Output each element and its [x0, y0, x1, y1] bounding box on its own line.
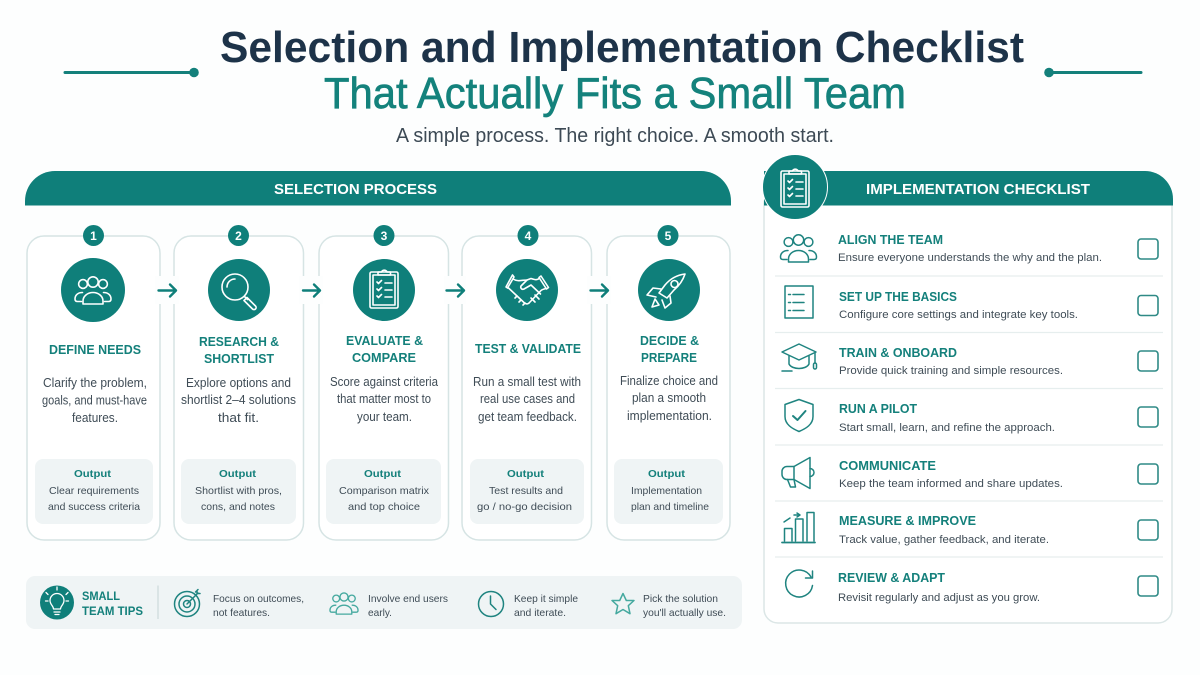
step heading: COMPARE — [352, 350, 416, 365]
tips heading — [82, 591, 143, 618]
output box — [181, 459, 296, 524]
step description: plan a smooth — [632, 391, 706, 405]
tip: focus on outcomes: not features. — [213, 607, 270, 619]
step description: Explore options and — [186, 376, 291, 390]
row: measure and improve: MEASURE & IMPROVE — [839, 514, 976, 528]
step description: Finalize choice and — [620, 374, 718, 388]
panel: small team tips — [26, 576, 742, 629]
title: Selection and Implementation Checklist — [220, 23, 1024, 72]
panel: step 1 define needs — [27, 225, 160, 540]
output box: Implementation — [631, 485, 702, 497]
output box: Output — [648, 468, 686, 480]
step number 3: 3 — [381, 229, 388, 243]
step number 5: 5 — [665, 229, 672, 243]
icon: team — [61, 258, 125, 322]
step heading: RESEARCH & — [199, 334, 279, 349]
panel: step 4 test and validate — [462, 225, 592, 540]
icon: clipboard — [353, 259, 415, 321]
tip: involve end users — [330, 593, 448, 619]
tip: pick the solution — [612, 593, 726, 619]
output box: plan and timeline — [631, 501, 709, 513]
tip: involve end users: Involve end users — [368, 593, 448, 605]
output box: Output — [74, 468, 112, 480]
output box: go / no-go decision — [477, 501, 572, 513]
step number 4 — [518, 225, 538, 246]
row: measure and improve — [782, 512, 1158, 546]
step number 1 — [83, 225, 104, 246]
tip: keep it simple — [478, 592, 578, 619]
tip: keep it simple: Keep it simple — [514, 593, 578, 605]
output box: and success criteria — [48, 501, 140, 513]
row: run a pilot: RUN A PILOT — [839, 402, 917, 416]
step heading: DEFINE NEEDS — [49, 342, 141, 357]
tip: focus on outcomes — [174, 590, 304, 619]
step number 4: 4 — [525, 229, 532, 243]
panel: step 2 research and shortlist — [174, 225, 304, 540]
step description: shortlist 2–4 solutions — [181, 393, 296, 407]
panel: step 5 decide and prepare — [607, 225, 730, 540]
row: review and adapt — [786, 570, 1158, 604]
row: train and onboard: Provide quick training and simple resources. — [839, 365, 1063, 377]
step description: real use cases and — [480, 392, 575, 406]
left decorative title rule — [65, 68, 199, 77]
step description: that fit. — [218, 411, 259, 425]
tips heading: TEAM TIPS — [82, 606, 143, 618]
row: review and adapt: Revisit regularly and adjust as you grow. — [838, 592, 1040, 604]
tip: focus on outcomes: Focus on outcomes, — [213, 593, 304, 605]
step description: that matter most to — [337, 392, 431, 406]
step description: get team feedback. — [478, 410, 577, 424]
arrow: step 1 to 2 — [155, 276, 179, 304]
row: communicate: COMMUNICATE — [839, 459, 936, 473]
step heading: SHORTLIST — [204, 351, 274, 366]
tips heading: SMALL — [82, 591, 120, 603]
row: align the team: Ensure everyone understands the why and the plan. — [838, 252, 1102, 264]
panel: selection process header — [25, 171, 731, 206]
step heading: DECIDE & — [640, 333, 699, 348]
step heading — [346, 333, 423, 365]
step description — [181, 376, 296, 425]
step description: your team. — [357, 410, 412, 424]
right decorative title rule — [1044, 68, 1141, 77]
output box: Output — [507, 468, 545, 480]
output box: Clear requirements — [49, 485, 139, 497]
icon: handshake — [496, 259, 558, 321]
step heading — [640, 333, 699, 365]
output box — [35, 459, 153, 524]
tip: keep it simple: and iterate. — [514, 607, 566, 619]
subtitle: A simple process. The right choice. A smooth start. — [396, 125, 834, 147]
row: align the team: ALIGN THE TEAM — [838, 233, 943, 247]
arrow: step 2 to 3 — [299, 276, 323, 304]
checklist header — [764, 171, 1173, 206]
output box: cons, and notes — [201, 501, 275, 513]
tip: involve end users: early. — [368, 607, 392, 619]
step number 2 — [228, 225, 249, 246]
title — [220, 23, 1024, 118]
output box — [614, 459, 723, 524]
tip: pick the solution: Pick the solution — [643, 593, 718, 605]
step heading: PREPARE — [641, 350, 697, 365]
step description — [620, 374, 718, 423]
row: set up the basics: Configure core settings and integrate key tools. — [839, 309, 1078, 321]
row: review and adapt: REVIEW & ADAPT — [838, 571, 945, 585]
output box: and top choice — [348, 501, 420, 513]
row: set up the basics: SET UP THE BASICS — [839, 290, 957, 304]
panel: selection process header: SELECTION PROCESS — [274, 181, 437, 198]
row: run a pilot — [785, 400, 1158, 434]
icon: rocket — [638, 259, 700, 321]
output box: Output — [364, 468, 402, 480]
step description: features. — [72, 411, 118, 425]
row: measure and improve: Track value, gather feedback, and iterate. — [839, 534, 1049, 546]
step heading: TEST & VALIDATE — [475, 341, 581, 356]
row: align the team — [780, 233, 1158, 264]
step number 3 — [374, 225, 394, 246]
step description — [42, 376, 147, 425]
step description: Score against criteria — [330, 375, 438, 389]
step heading — [199, 334, 279, 366]
step description: Clarify the problem, — [43, 376, 147, 390]
step number 1: 1 — [90, 229, 97, 243]
row: set up the basics — [785, 286, 1158, 321]
output box: Shortlist with pros, — [195, 485, 282, 497]
step description: Run a small test with — [473, 375, 581, 389]
step heading: EVALUATE & — [346, 333, 423, 348]
step description: goals, and must-have — [42, 394, 147, 408]
step number 5 — [658, 225, 678, 246]
panel: step 3 evaluate and compare — [319, 225, 448, 540]
arrow: step 4 to 5 — [587, 276, 611, 304]
output box — [326, 459, 441, 524]
row: run a pilot: Start small, learn, and refine the approach. — [839, 422, 1055, 434]
output box — [470, 459, 584, 524]
step description: implementation. — [627, 409, 712, 423]
icon: header clipboard badge — [762, 154, 828, 220]
arrow: step 3 to 4 — [444, 276, 466, 304]
tip: pick the solution: you'll actually use. — [643, 607, 726, 619]
panel: implementation checklist — [762, 154, 1173, 623]
icon: lightbulb — [40, 586, 74, 620]
output box: Test results and — [489, 485, 563, 497]
output box: Output — [219, 468, 257, 480]
step description — [473, 375, 581, 424]
row: communicate: Keep the team informed and share updates. — [839, 478, 1063, 490]
title: That Actually Fits a Small Team — [324, 69, 906, 118]
step description — [330, 375, 438, 424]
row: train and onboard — [782, 344, 1158, 377]
output box: Comparison matrix — [339, 485, 430, 497]
icon: magnifier — [208, 259, 270, 321]
step number 2: 2 — [235, 229, 242, 243]
row: train and onboard: TRAIN & ONBOARD — [839, 346, 957, 360]
checklist header: IMPLEMENTATION CHECKLIST — [866, 181, 1090, 198]
row: communicate — [782, 458, 1158, 490]
